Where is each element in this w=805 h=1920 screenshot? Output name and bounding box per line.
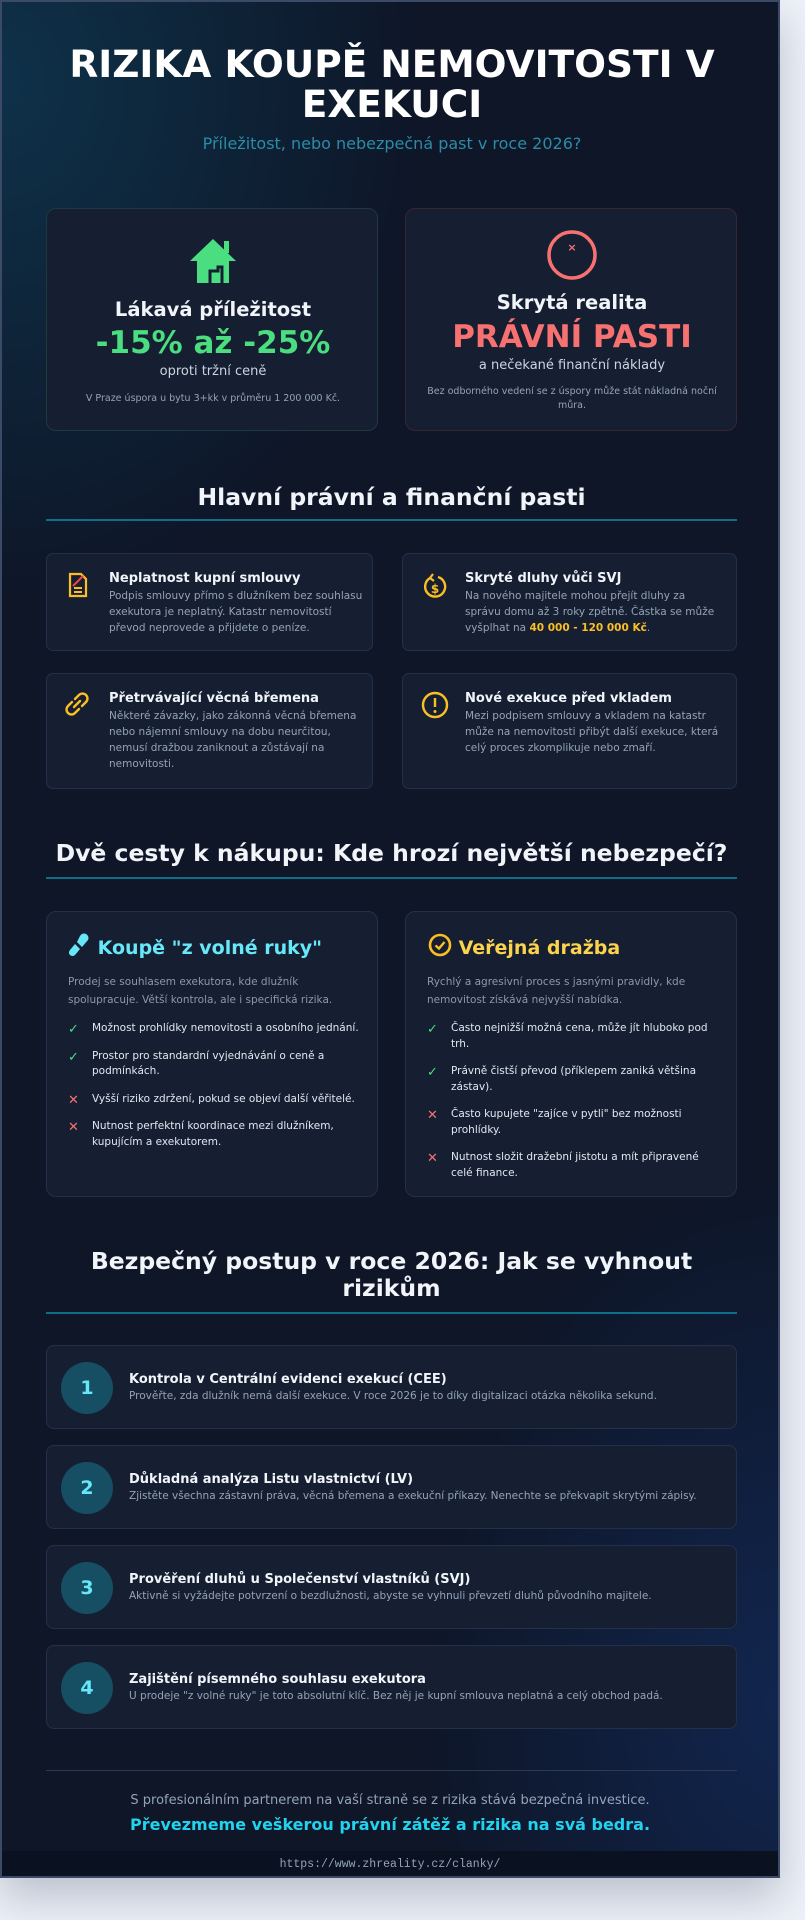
list: pros and cons: ✕ bbox=[427, 1151, 438, 1166]
icon: check badge bbox=[428, 934, 452, 956]
icon: chain link bbox=[65, 692, 89, 716]
description: Rychlý a agresivní proces s jasnými pravidly, kde nemovitost získává nejvyšší nabídka. bbox=[427, 976, 685, 1006]
icon: house bbox=[190, 239, 236, 283]
text: Nové exekuce před vkladem bbox=[465, 691, 672, 706]
list: pros and cons bbox=[427, 1021, 708, 1178]
panel: trap 2 bbox=[402, 553, 737, 651]
icon: document bbox=[68, 572, 88, 598]
list: pros and cons: ✓ bbox=[68, 1022, 79, 1037]
step 2: Důkladná analýza Listu vlastnictví (LV) bbox=[129, 1472, 413, 1487]
step 1 bbox=[46, 1345, 737, 1429]
list: pros and cons: ✕ bbox=[68, 1120, 79, 1135]
list: pros and cons: Právně čistší převod (příklepem zaniká většina zástav). bbox=[451, 1065, 696, 1092]
stat: discount: -15% až -25% bbox=[96, 325, 330, 361]
text: Přetrvávající věcná břemena bbox=[109, 691, 319, 706]
stat: legal traps: PRÁVNÍ PASTI bbox=[452, 319, 692, 355]
list: pros and cons: ✓ bbox=[427, 1022, 438, 1037]
icon: x circle: × bbox=[567, 241, 577, 254]
text: costs: a nečekané finanční náklady bbox=[479, 358, 665, 373]
text bbox=[465, 570, 714, 634]
text: Neplatnost kupní smlouvy bbox=[109, 571, 300, 586]
list: pros and cons: Nutnost složit dražební jistotu a mít připravené celé finance. bbox=[451, 1151, 699, 1178]
panel: opportunity bbox=[46, 208, 378, 431]
description: Prodej se souhlasem exekutora, kde dlužník spolupracuje. Větší kontrola, ale i specifická rizika. bbox=[68, 976, 332, 1006]
list: pros and cons: Možnost prohlídky nemovitosti a osobního jednání. bbox=[92, 1022, 359, 1034]
heading: reality: Skrytá realita bbox=[497, 291, 647, 314]
text bbox=[465, 691, 718, 754]
list: pros and cons: ✕ bbox=[68, 1092, 79, 1108]
icon: dollar bbox=[424, 573, 446, 598]
heading: opportunity: Lákavá příležitost bbox=[115, 298, 311, 321]
text: Na nového majitele mohou přejít dluhy za správu domu až 3 roky zpětně. Částka se může vyšplhat na 40 000 - 120 000 Kč. bbox=[465, 590, 714, 634]
list: pros and cons: Často kupujete "zajíce v pytli" bez možnosti prohlídky. bbox=[451, 1108, 682, 1136]
text: Skryté dluhy vůči SVJ bbox=[465, 571, 621, 586]
step 4: Zajištění písemného souhlasu exekutora bbox=[129, 1672, 426, 1687]
step 3: Aktivně si vyžádejte potvrzení o bezdlužnosti, abyste se vyhnuli převzetí dluhů původního majitele. bbox=[129, 1590, 652, 1602]
step 4: U prodeje "z volné ruky" je toto absolutní klíč. Bez něj je kupní smlouva neplatná a celý obchod padá. bbox=[129, 1690, 663, 1702]
icon: dollar: $ bbox=[431, 582, 439, 596]
panel: trap 1 bbox=[46, 553, 373, 651]
footer: url: https://www.zhreality.cz/clanky/ bbox=[280, 1858, 500, 1871]
heading: two paths: Dvě cesty k nákupu: Kde hrozí největší nebezpečí? bbox=[56, 839, 727, 867]
step 4 bbox=[46, 1645, 737, 1729]
text: vs market: oproti tržní ceně bbox=[160, 364, 266, 379]
heading with icon: Veřejná dražba bbox=[459, 937, 620, 959]
text bbox=[109, 571, 362, 634]
step 2: Zjistěte všechna zástavní práva, věcná břemena a exekuční příkazy. Nenechte se překvapit skrytými zápisy. bbox=[129, 1490, 697, 1502]
list: pros and cons: ✓ bbox=[68, 1050, 79, 1064]
heading with icon: Koupě "z volné ruky" bbox=[98, 937, 322, 959]
step 2: 2 bbox=[80, 1477, 94, 1499]
heading: traps: Hlavní právní a finanční pasti bbox=[197, 483, 586, 511]
title: RIZIKA KOUPĚ NEMOVITOSTI V EXEKUCI bbox=[69, 42, 715, 126]
note: Bez odborného vedení se z úspory může stát nákladná noční můra. bbox=[427, 386, 717, 411]
footer: url bbox=[2, 1851, 778, 1878]
list: pros and cons: Prostor pro standardní vyjednávání o ceně a podmínkách. bbox=[92, 1050, 324, 1077]
icon: alert bbox=[422, 692, 448, 718]
step 4: 4 bbox=[80, 1677, 94, 1699]
step 3: Prověření dluhů u Společenství vlastníků (SVJ) bbox=[129, 1572, 470, 1587]
step 1: 1 bbox=[80, 1377, 94, 1399]
list: pros and cons: Často nejnižší možná cena, může jít hluboko pod trh. bbox=[451, 1022, 708, 1050]
text: Mezi podpisem smlouvy a vkladem na katastr může na nemovitosti přibýt další exekuce, která celý proces zkomplikuje nebo zmaří. bbox=[465, 710, 718, 754]
step 3 bbox=[46, 1545, 737, 1629]
list: pros and cons: ✓ bbox=[427, 1065, 438, 1080]
closing text: S profesionálním partnerem na vaší straně se z rizika stává bezpečná investice. bbox=[130, 1793, 650, 1808]
step 1: Kontrola v Centrální evidenci exekucí (CEE) bbox=[129, 1372, 447, 1387]
panel: trap 3 bbox=[46, 673, 373, 789]
panel: auction bbox=[405, 911, 737, 1197]
panel: hidden reality bbox=[405, 208, 737, 431]
text: Některé závazky, jako zákonná věcná břemena nebo nájemní smlouvy na dobu neurčitou, nemusí dražbou zaniknout a zůstávají na nemovitosti. bbox=[109, 710, 356, 770]
step 2 bbox=[46, 1445, 737, 1529]
heading: safe procedure: Bezpečný postup v roce 2026: Jak se vyhnout rizikům bbox=[91, 1247, 692, 1302]
subtitle: Příležitost, nebo nebezpečná past v roce 2026? bbox=[203, 134, 581, 153]
step 3: 3 bbox=[80, 1577, 94, 1599]
call to action: Převezmeme veškerou právní zátěž a rizika na svá bedra. bbox=[130, 1815, 650, 1834]
list: pros and cons bbox=[68, 1022, 359, 1148]
list: pros and cons: ✕ bbox=[427, 1108, 438, 1123]
icon: x circle bbox=[547, 230, 597, 280]
icon: handshake bbox=[69, 934, 88, 956]
list: pros and cons: Vyšší riziko zdržení, pokud se objeví další věřitelé. bbox=[92, 1092, 355, 1104]
note: V Praze úspora u bytu 3+kk v průměru 1 200 000 Kč. bbox=[86, 393, 340, 404]
panel: trap 4 bbox=[402, 673, 737, 789]
list: pros and cons: Nutnost perfektní koordinace mezi dlužníkem, kupujícím a exekutorem. bbox=[92, 1120, 334, 1148]
step 1: Prověřte, zda dlužník nemá další exekuce. V roce 2026 je to díky digitalizaci otázka několika sekund. bbox=[129, 1390, 657, 1402]
panel: free sale bbox=[46, 911, 378, 1197]
text: Podpis smlouvy přímo s dlužníkem bez souhlasu exekutora je neplatný. Katastr nemovitostí převod neprovede a přijdete o peníze. bbox=[109, 590, 362, 634]
